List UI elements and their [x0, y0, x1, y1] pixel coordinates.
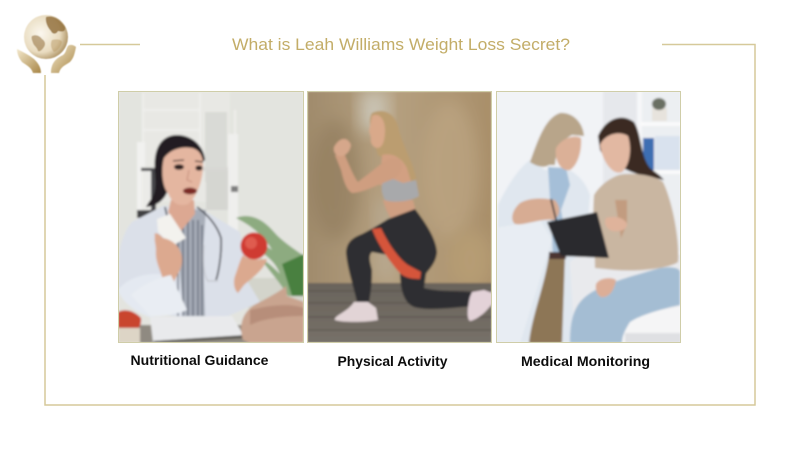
pen [551, 199, 558, 228]
face [162, 147, 203, 205]
right hand [234, 255, 267, 293]
head [369, 115, 385, 148]
wooden floor [307, 283, 492, 343]
neck [168, 200, 195, 232]
blue shirt [548, 167, 570, 258]
icon: globe [24, 15, 68, 59]
striped shirt [175, 208, 206, 317]
desk [138, 324, 250, 342]
patient face [600, 133, 630, 173]
plant [236, 216, 304, 308]
grey sports bra [382, 176, 419, 202]
doctor face [556, 136, 581, 170]
doctor hair [530, 113, 584, 167]
caption: medical monitoring: Medical Monitoring [521, 353, 650, 369]
jeans [570, 267, 680, 343]
caption: physical activity: Physical Activity [338, 353, 448, 369]
apple on desk [118, 310, 141, 330]
front shoe [335, 302, 378, 322]
doctor white coat [496, 160, 590, 343]
orange resistance band [372, 228, 421, 279]
patient lower hand [596, 278, 616, 297]
medical bed [568, 255, 681, 343]
black leggings [346, 209, 474, 309]
photo: physical activity [307, 91, 498, 343]
hair [370, 111, 416, 186]
stethoscope [165, 207, 221, 280]
gold frame [45, 44, 755, 405]
title: What is Leah Williams Weight Loss Secret? [232, 35, 570, 54]
photo borders [118, 92, 680, 342]
patient hand on clipboard [605, 217, 627, 231]
apple [240, 232, 268, 260]
black clipboard [547, 212, 609, 258]
icon: left hand [17, 49, 41, 73]
photo: medical monitoring [496, 91, 681, 343]
patient hands [241, 286, 304, 343]
facial features [173, 160, 203, 194]
blurred wall [307, 91, 492, 291]
icon: right hand [51, 45, 76, 73]
cardigan [593, 174, 678, 271]
patient hair [598, 118, 664, 180]
left hand and arm [155, 233, 182, 284]
arm [334, 154, 393, 194]
logo: globe in hands [17, 15, 76, 73]
rear shoe [468, 290, 498, 321]
sleeve [161, 274, 188, 314]
clinic wall and shelves [497, 92, 680, 254]
clipboard and paper [150, 316, 244, 342]
hair [146, 135, 205, 207]
white bottle [157, 214, 186, 246]
torso skin [380, 154, 412, 185]
photo: nutritional guidance [118, 91, 304, 343]
caption: nutritional guidance: Nutritional Guidance [130, 352, 269, 368]
clinic background [118, 91, 304, 343]
brown trousers [529, 255, 565, 343]
fist [334, 139, 351, 156]
doctor arm and hand [512, 198, 559, 224]
doctor coat [118, 206, 260, 318]
